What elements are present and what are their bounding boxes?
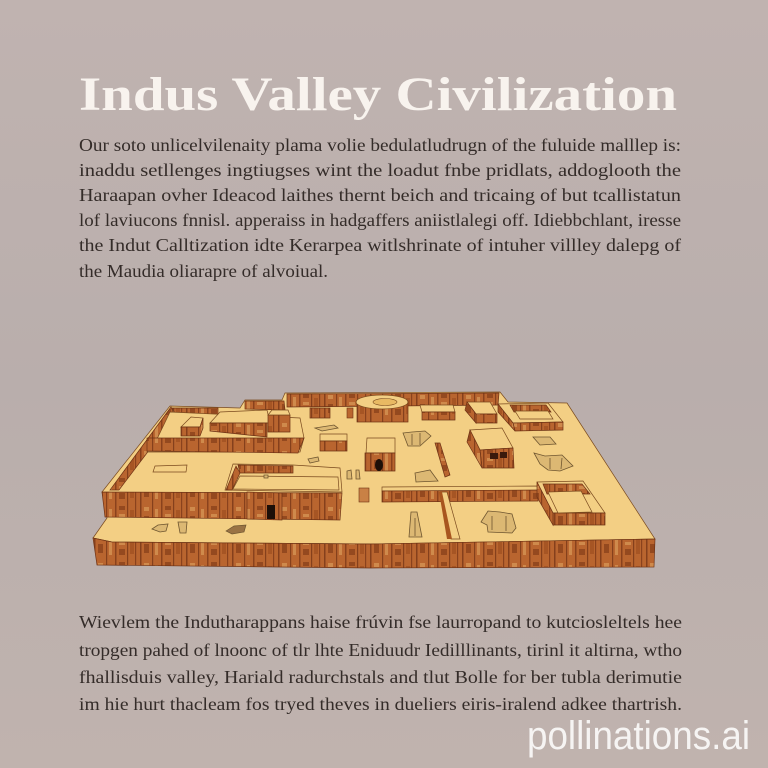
animal and figure sketches [152, 425, 573, 537]
round tower [356, 395, 408, 422]
ledge person [178, 522, 187, 533]
closing text block: fhallisduis valley, Hariald radurchstals and tlut Bolle for ber tubla derimutie [79, 667, 682, 687]
central building with door [365, 438, 395, 471]
intro text block: Haraapan ovher Ideacod laithes thernt beich and tricaing of but tcallistatun [79, 185, 681, 205]
small rear buildings [310, 408, 353, 418]
upper right animal [533, 437, 556, 445]
left perimeter wall [110, 407, 175, 490]
plaza group [403, 431, 431, 446]
plaza animal [415, 470, 438, 482]
intro text block: the Indut Calltization idte Kerarpea witlshrinate of intuher villley dalepg of [79, 235, 681, 255]
intro text block: lof laviucons fnnisl. apperaiss in hadgaffers aniistlalegi off. Idiebbchlant, iresse [79, 210, 681, 230]
closing text block: Wievlem the Indutharappans haise frúvin fse laurropand to kutciosleltels hee [79, 612, 682, 632]
central complex [210, 410, 290, 437]
gatehouse with dark doorway [247, 492, 282, 520]
standing person [409, 512, 422, 537]
closing text block: tropgen pahed of lnoonc of tlr lhte Eniduudr Iedilllinants, tirinl it altirna, wtho [79, 640, 682, 660]
ledge ox [226, 525, 246, 534]
right front enclosure [537, 481, 605, 525]
ledge animal [152, 524, 168, 532]
intro text block: Our soto unlicelvilenaity plama volie bedulatludrugn of the fuluide malllep is: [79, 135, 681, 155]
small terrace building [181, 417, 203, 436]
back wall segments [172, 393, 499, 415]
left block front wall [102, 492, 342, 520]
intro text block: the Maudia oliarapre of alvoiual. [79, 261, 328, 281]
bull sketch [481, 511, 516, 533]
small figures [264, 457, 360, 479]
inner courtyard wall [225, 464, 342, 492]
closing text block: im hie hurt thacleam fos tryed theves in dueliers eiris-iralend adkee thartrish. [79, 694, 682, 714]
rear right block [465, 402, 497, 423]
cattle sketch [534, 453, 573, 471]
watermark: pollinations.ai [527, 714, 750, 758]
thin wall [435, 443, 450, 477]
dividing wall [439, 492, 460, 539]
right building with windows [467, 428, 514, 468]
ground surface [93, 392, 655, 544]
illustration: isometric Harappan city plan [93, 392, 655, 568]
mid left building [320, 434, 347, 451]
top right enclosure [498, 403, 563, 431]
front slab wall [93, 538, 655, 568]
title: Indus Valley Civilization [79, 68, 677, 121]
closing text block [79, 612, 682, 714]
intro text block [79, 135, 681, 281]
rear centre block [420, 405, 455, 420]
right front long wall [359, 486, 538, 502]
water tank slab [153, 465, 187, 472]
plaza figures [315, 425, 338, 431]
upper terrace [147, 412, 304, 453]
intro text block: inaddu setllenges ingtiugses wint the loadut fnbe pridlats, addoglooth the [79, 160, 681, 180]
